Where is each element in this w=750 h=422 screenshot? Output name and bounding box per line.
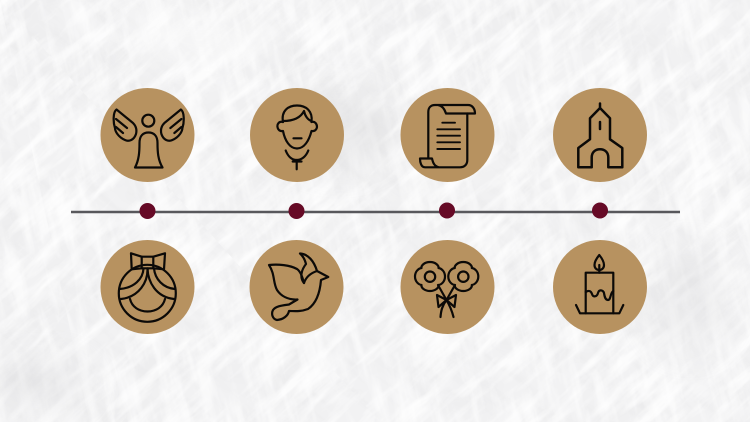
icon: angel [100, 88, 194, 182]
icon: priest [250, 88, 344, 182]
timeline dots [140, 202, 608, 219]
timeline line [71, 211, 680, 213]
icon: wreath ornament [100, 240, 194, 334]
icon: scroll [400, 88, 494, 182]
icon: candle [553, 240, 647, 334]
icon: dove [250, 240, 344, 334]
icon: church [553, 88, 647, 182]
icon: flowers with bow [400, 240, 494, 334]
